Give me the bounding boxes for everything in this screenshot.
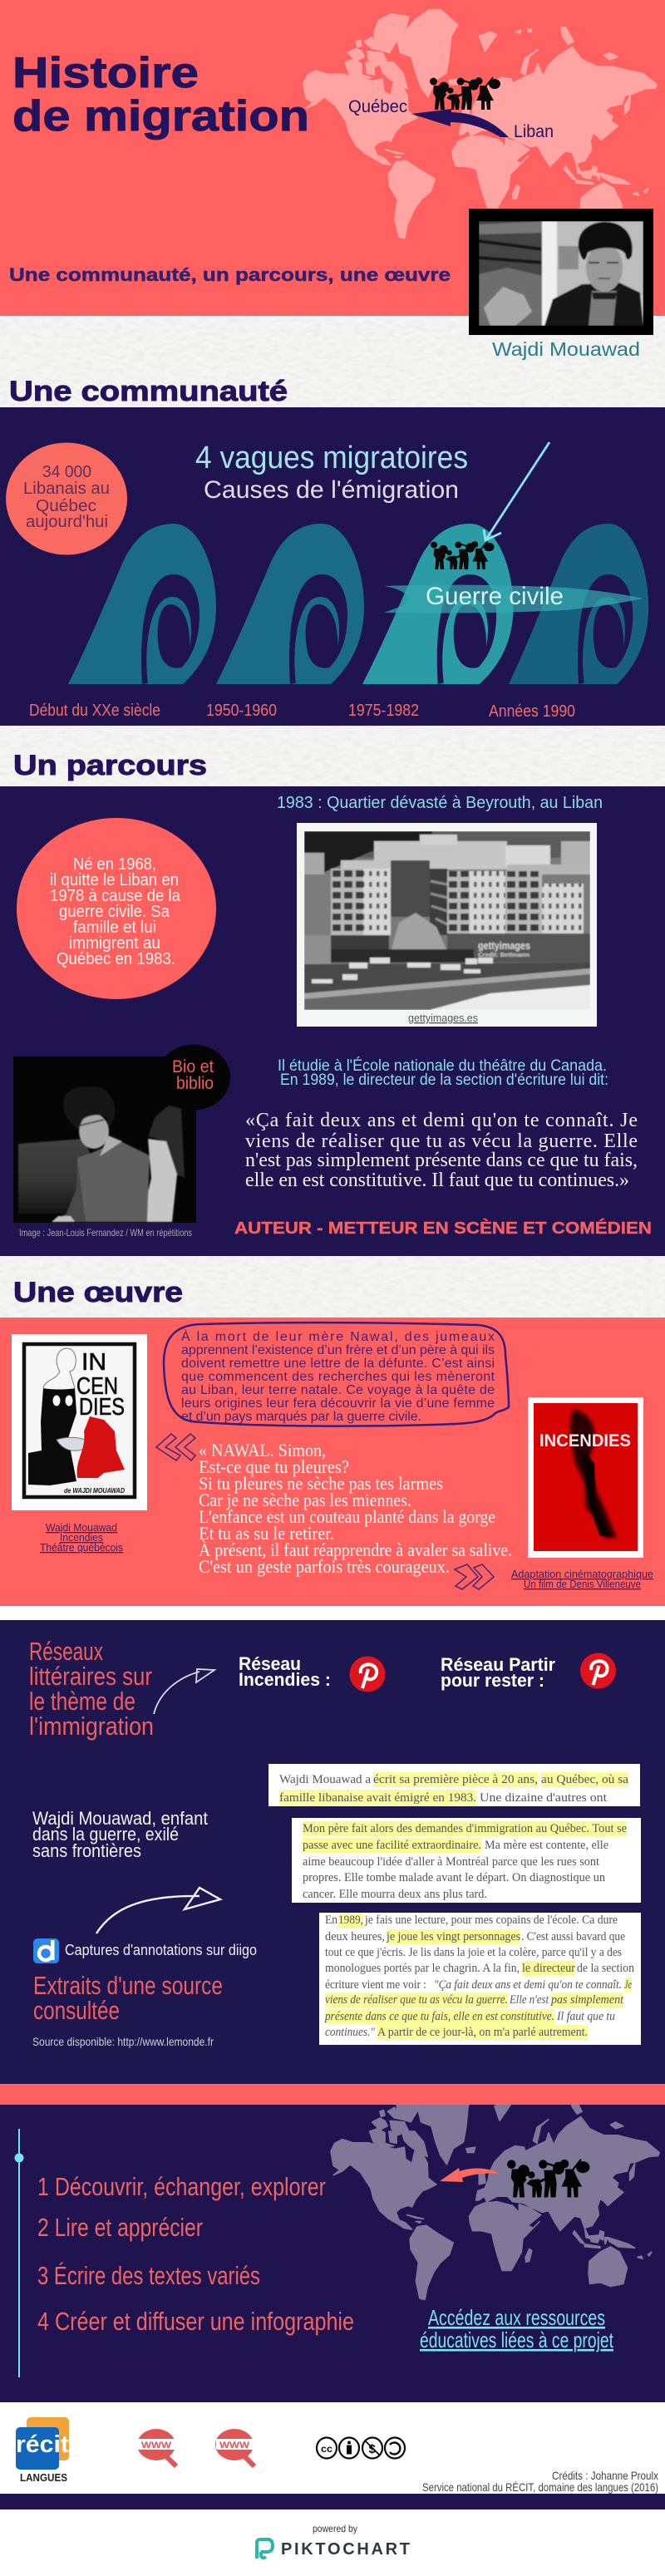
- button: bio et biblio: biblio: [176, 1074, 214, 1093]
- panel: compétences et ressources: [0, 2081, 665, 2402]
- book caption: Wajdi Mouawad: [46, 1521, 117, 1534]
- text: études: Il étudie à l'École nationale du théâtre du Canada.: [278, 1057, 607, 1075]
- panel: une œuvre: [0, 1318, 665, 1606]
- caption: Wajdi Mouawad: Wajdi Mouawad: [492, 338, 640, 360]
- heading: réseaux littéraires: littéraires sur: [29, 1662, 152, 1691]
- poem: Et tu as su le retirer.: [199, 1523, 334, 1544]
- film poster: [528, 1397, 643, 1558]
- timeline labels: 1950-1960: [206, 702, 277, 720]
- photo: Beyrouth: Credit: Bettmann: [478, 953, 530, 958]
- callout: synopsis: et d’un pays marqués par la guerre civile.: [181, 1410, 421, 1424]
- extract 3: En: [325, 1914, 337, 1927]
- heading: causes de l'émigration: Causes de l'émigration: [204, 476, 459, 504]
- callout circle: 34 000: aujourd'hui: [26, 513, 108, 531]
- extract 3: . C'est aussi bavard que: [521, 1930, 625, 1943]
- photo: Beyrouth: gettyimages: [478, 939, 530, 952]
- callout circle: biographie: famille et lui: [73, 919, 156, 937]
- book cover: Incendies: IN: [81, 1349, 106, 1376]
- arrow: coral double: [440, 2168, 499, 2182]
- text: études: En 1989, le directeur de la section d'écriture lui dit:: [280, 1071, 608, 1089]
- poem: Car je ne sèche pas les miennes.: [199, 1490, 411, 1510]
- icon: diigo: [33, 1938, 59, 1963]
- poem: Si tu pleures ne sèche pas tes larmes: [199, 1473, 443, 1494]
- extract 3: je fais une lecture, pour mes copains de l'école. Ca dure: [364, 1914, 618, 1927]
- poem: À présent, il faut réapprendre à avaler sa salive.: [199, 1539, 512, 1560]
- link: ressources: Accédez aux ressources: [428, 2305, 605, 2330]
- arrow: to wave 3: [484, 442, 549, 540]
- subtitle: Une communauté, un parcours, une œuvre: [9, 264, 451, 285]
- quote: «Ça fait deux ans et demi qu'on te connaît. Je: [245, 1110, 638, 1131]
- extract 3: présente dans ce que tu fais, elle en est constitutive.: [324, 2010, 554, 2023]
- photo: portrait répétition: [13, 1057, 196, 1223]
- label: réseau incendies: Réseau: [239, 1653, 301, 1674]
- arrow: vers les réseaux: [154, 1669, 214, 1714]
- poem: C'est un geste parfois très courageux.: [199, 1556, 450, 1577]
- extract 1: au Québec, où sa: [541, 1773, 628, 1786]
- extract 3: deux heures,: [325, 1930, 385, 1943]
- caption: 1983: 1983 : Quartier dévasté à Beyrouth, au Liban: [277, 794, 603, 812]
- title: Histoire: [12, 49, 199, 97]
- icon: closing chevrons: [455, 1564, 494, 1589]
- timeline labels: Années 1990: [489, 702, 575, 721]
- text: wajdi mouawad enfant: sans frontières: [32, 1840, 141, 1861]
- label: réseau incendies: Incendies :: [239, 1669, 331, 1690]
- arrow: vers les extraits: [96, 1888, 220, 1933]
- timeline labels: Début du XXe siècle: [29, 702, 160, 720]
- film poster: INCENDIES: [539, 1431, 631, 1451]
- extract 3: A partir de ce jour-là, on m'a parlé autrement.: [377, 2026, 588, 2039]
- film caption: Un film de Denis Villeneuve: [524, 1578, 641, 1590]
- quote: n'est pas simplement présente dans ce que tu fais,: [245, 1150, 638, 1171]
- heading: extraits: [33, 1971, 223, 2025]
- callout: synopsis: [164, 1322, 509, 1426]
- icon: family on gray map: [507, 2160, 589, 2197]
- callout circle: biographie: [17, 818, 216, 999]
- icon: world map: [303, 10, 657, 239]
- logo: récit langues: [16, 2417, 69, 2484]
- book cover: Incendies: CEN: [76, 1373, 118, 1400]
- icon: world map gray: [330, 2105, 660, 2301]
- extract 3: le directeur: [522, 1962, 575, 1975]
- callout: synopsis: doivent remettre une lettre de la défunte. C’est ainsi: [181, 1357, 495, 1371]
- extract 1: famille libanaise avait émigré en 1983.: [279, 1791, 476, 1805]
- book caption: Théâtre québécois: [40, 1541, 123, 1554]
- link: ressources: [420, 2305, 614, 2352]
- poem: « NAWAL. Simon,: [199, 1440, 326, 1460]
- heading: Une œuvre: Une œuvre: [13, 1277, 183, 1308]
- extract 2: Mon père fait alors des demandes d'immigration au Québec. Tout se: [303, 1822, 627, 1835]
- list of steps: 2 Lire et apprécier: [37, 2213, 203, 2242]
- icon: migrating family: [430, 77, 500, 110]
- extract 3: Elle n'est: [509, 1993, 549, 2007]
- label: Liban: Liban: [514, 122, 554, 141]
- callout: synopsis: que commencent des recherches qui les mèneront: [181, 1370, 495, 1384]
- callout circle: 34 000: Québec: [36, 497, 96, 515]
- callout: synopsis: leurs origines leur fera découvrir la vie d’une femme: [181, 1396, 495, 1411]
- film caption: [511, 1568, 653, 1590]
- heading: réseaux littéraires: l'immigration: [29, 1712, 154, 1741]
- quote: viens de réaliser que tu as vécu la guerre. Elle: [245, 1130, 638, 1152]
- extract 1: Une dizaine d'autres ont: [480, 1791, 608, 1805]
- poem: [199, 1440, 512, 1577]
- extract 1: [268, 1764, 640, 1806]
- icon: creative commons: $: [369, 2442, 376, 2456]
- source: Source disponible: http://www.lemonde.fr: [32, 2035, 214, 2048]
- icon: creative commons: cc: [321, 2443, 332, 2455]
- heading: réseaux littéraires: [29, 1637, 154, 1741]
- arrow: Liban to Québec: [411, 109, 509, 137]
- extract 2: [292, 1818, 641, 1903]
- extract 3: écriture vient me voir :: [325, 1978, 426, 1992]
- heading: extraits: consultée: [33, 1996, 120, 2025]
- film caption: Adaptation cinématographique: [511, 1568, 653, 1580]
- title: [12, 49, 309, 140]
- extract 2: passe avec une facilité extraordinaire.: [303, 1839, 481, 1852]
- extract 2: propres. Elle tombe malade avant le départ. On diagnostique un: [303, 1871, 605, 1884]
- callout circle: 34 000: Libanais au: [23, 480, 110, 498]
- extract 3: je joue les vingt personnages: [386, 1930, 520, 1943]
- label: réseau partir: pour rester :: [441, 1670, 544, 1691]
- icon: family on wave: [431, 541, 494, 569]
- callout circle: 34 000: 34 000: [42, 463, 91, 481]
- extract 3: 1989,: [338, 1914, 363, 1927]
- timeline labels: 1975-1982: [348, 702, 419, 720]
- extract 1: écrit sa première pièce à 20 ans,: [373, 1773, 538, 1786]
- icon: www search 1: [137, 2429, 176, 2466]
- callout circle: biographie: il quitte le Liban en: [50, 871, 179, 889]
- logo: récit langues: LANGUES: [20, 2471, 67, 2484]
- extract 3: viens de réaliser que tu as vécu la guerre.: [325, 1993, 508, 2007]
- logo: récit langues: récit: [16, 2431, 69, 2458]
- book caption: [40, 1521, 123, 1554]
- text: wajdi mouawad enfant: Wajdi Mouawad, enfant: [32, 1808, 208, 1829]
- paper background bands: [0, 316, 665, 1318]
- image credit: Image : Jean-Louis Fernandez / WM en répétitions: [19, 1227, 192, 1239]
- list of steps: 3 Écrire des textes variés: [37, 2261, 260, 2290]
- chart: waves: [68, 524, 648, 684]
- book caption: Incendies: [60, 1531, 103, 1544]
- label: réseau partir: Réseau Partir: [441, 1654, 555, 1675]
- callout circle: biographie: Québec en 1983.: [57, 950, 175, 968]
- icon: www search 2: WWW: [219, 2441, 250, 2450]
- callout circle: 34 000: [6, 442, 127, 555]
- extract 3: tout ce que j'écris. Je lis dans la joie et la colère, parce qu'il y a des: [325, 1946, 622, 1959]
- poem: L'enfance est un couteau planté dans la gorge: [199, 1506, 495, 1527]
- text: wajdi mouawad enfant: [32, 1808, 208, 1861]
- title: de migration: [12, 92, 309, 140]
- button: bio et biblio: [157, 1044, 230, 1111]
- heading: extraits: Extraits d'une source: [33, 1971, 223, 2000]
- powered by: powered by: [313, 2523, 357, 2534]
- icon: creative commons: [317, 2437, 405, 2459]
- book cover: Incendies: de WAJDI MOUAWAD: [64, 1487, 125, 1495]
- panel: un parcours: [0, 786, 665, 1256]
- extract 3: Je: [624, 1978, 632, 1992]
- icon: pinterest 1: [349, 1656, 386, 1692]
- extract 3: monologues portés par le chagrin. A la fin,: [325, 1962, 520, 1975]
- tagline: auteur: AUTEUR - METTEUR EN SCÈNE ET COMÉDIEN: [234, 1219, 652, 1238]
- label: réseau partir: [441, 1654, 555, 1691]
- heading: Une communauté: Une communauté: [9, 376, 288, 407]
- panel: une communauté: [0, 407, 665, 726]
- heading: Un parcours: Un parcours: [13, 750, 207, 781]
- poem: Est-ce que tu pleures?: [199, 1456, 349, 1477]
- timeline line: [15, 2129, 23, 2377]
- book cover: Incendies: DIES: [79, 1394, 125, 1421]
- list of steps: [37, 2172, 354, 2336]
- callout circle: biographie: guerre civile. Sa: [59, 903, 170, 921]
- callout: synopsis: au Liban, leur terre natale. Ce voyage à la quête de: [181, 1383, 495, 1397]
- callout circle: biographie: immigrent au: [69, 934, 160, 953]
- label: réseau incendies: [239, 1653, 331, 1690]
- extract 2: Ma mère est contente, elle: [485, 1839, 608, 1852]
- timeline labels: [29, 702, 575, 721]
- extract 3: [319, 1913, 641, 2045]
- extract 2: cancer. Elle mourra deux ans plus tard.: [303, 1888, 487, 1901]
- heading: réseaux littéraires: Réseaux: [29, 1637, 103, 1666]
- panel: header: [0, 0, 665, 316]
- extract 2: aime beaucoup l'idée d'aller à Montréal parce que les rues sont: [303, 1855, 600, 1869]
- label: Guerre civile: Guerre civile: [426, 583, 564, 610]
- panel: footer: [0, 2402, 665, 2494]
- callout: synopsis: À la mort de leur mère Nawal, des jumeaux: [181, 1328, 495, 1344]
- quote: [245, 1110, 638, 1191]
- heading: réseaux littéraires: le thème de: [29, 1687, 135, 1716]
- callout circle: biographie: Né en 1968,: [73, 855, 156, 874]
- panel: réseaux et extraits: [0, 1620, 665, 2084]
- callout band: guerre civile: [384, 585, 643, 613]
- quote: elle en est constitutive. Il faut que tu continues.»: [245, 1170, 629, 1191]
- icon: www search 1: WWW: [141, 2441, 172, 2450]
- label: Québec: Québec: [348, 97, 407, 116]
- list of steps: 4 Créer et diffuser une infographie: [37, 2307, 354, 2336]
- extract 1: Wajdi Mouawad a: [279, 1773, 371, 1786]
- icon: www search 2: [215, 2429, 254, 2466]
- text: études: [278, 1057, 608, 1089]
- icon: opening chevrons: [156, 1434, 195, 1460]
- credits: [422, 2469, 658, 2494]
- extract 3: de la section: [577, 1962, 634, 1975]
- book cover: Incendies: [12, 1334, 147, 1510]
- text: wajdi mouawad enfant: dans la guerre, exilé: [32, 1824, 179, 1845]
- callout circle: biographie: 1978 à cause de la: [50, 887, 181, 905]
- extract 3: Il faut que tu: [556, 2010, 615, 2023]
- icon: pinterest 2: [580, 1652, 616, 1689]
- caption: gettyimages.es: gettyimages.es: [408, 1012, 478, 1024]
- label: captures diigo: Captures d'annotations sur diigo: [65, 1942, 257, 1958]
- extract 3: continues.": [325, 2026, 376, 2039]
- extract 3: "Ça fait deux ans et demi qu'on te connaît.: [434, 1978, 622, 1992]
- logo: piktochart: PIKTOCHART: [281, 2540, 410, 2559]
- callout: synopsis: apprennent l’existence d’un frère et d’un père à qui ils: [181, 1343, 495, 1357]
- extract 3: pas simplement: [550, 1993, 624, 2007]
- list of steps: 1 Découvrir, échanger, explorer: [37, 2172, 326, 2201]
- button: bio et biblio: Bio et: [172, 1057, 214, 1076]
- photo: Beyrouth: [297, 823, 597, 1027]
- heading: 4 vagues migratoires: 4 vagues migratoires: [195, 441, 468, 475]
- portrait: Wajdi Mouawad: [469, 209, 653, 335]
- coral divider band: [0, 2084, 665, 2105]
- footer band: [0, 2494, 665, 2510]
